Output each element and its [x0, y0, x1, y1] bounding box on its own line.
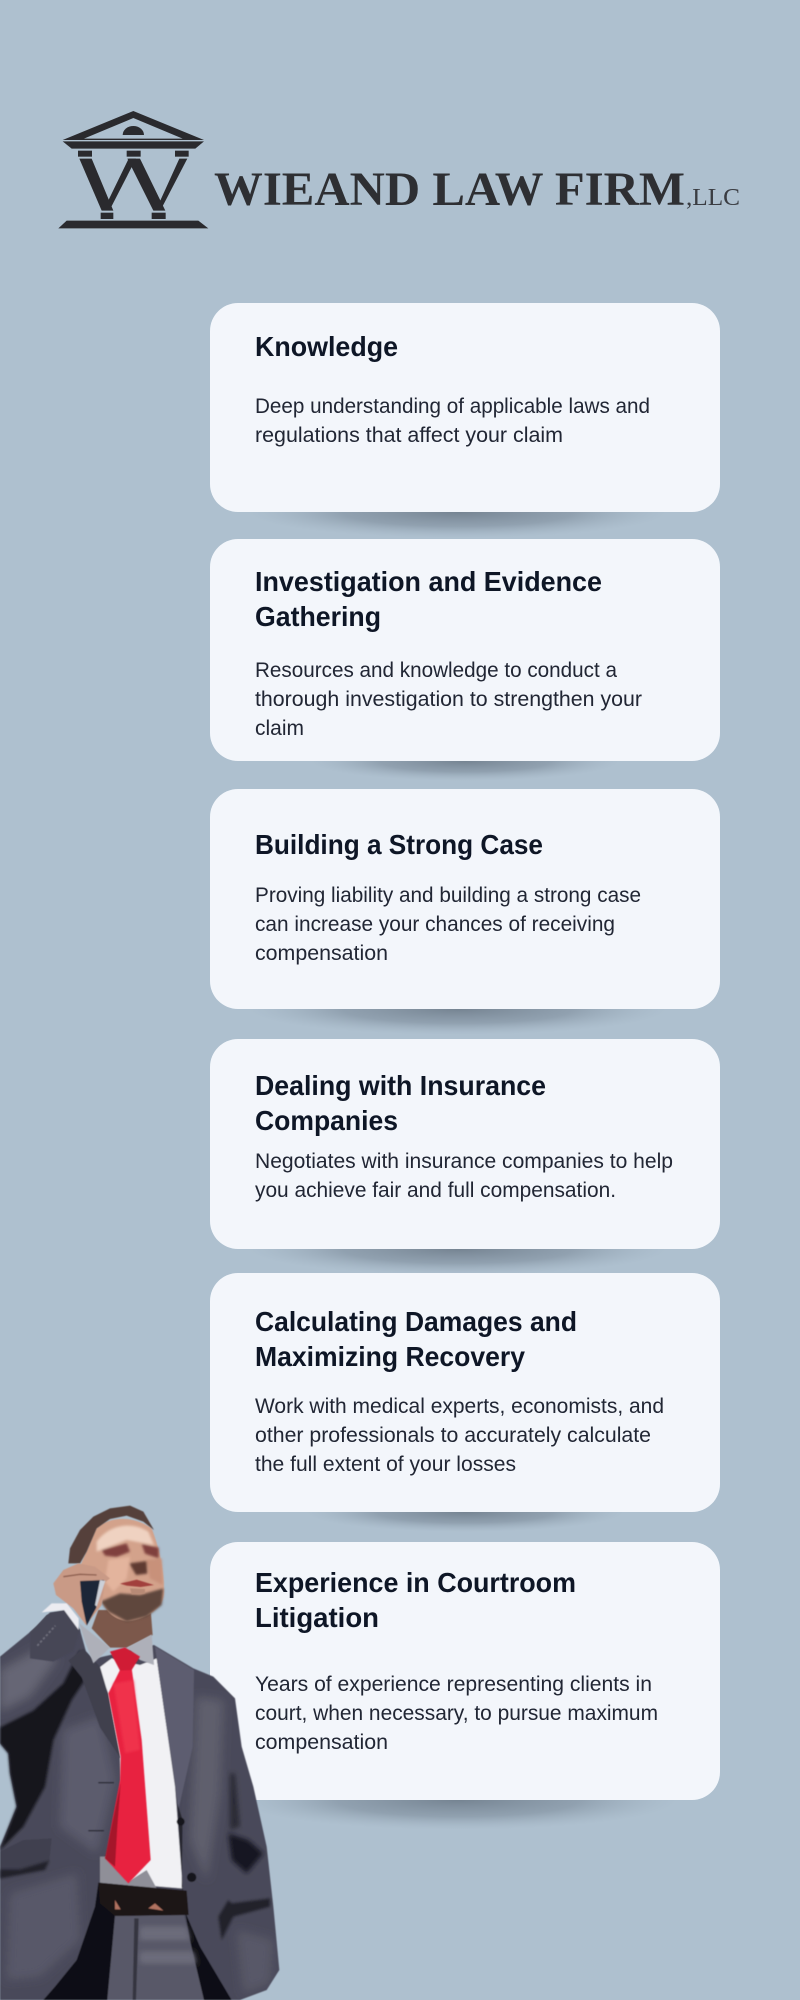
- heading: Maximizing Recovery: [255, 1341, 526, 1372]
- panel: Building a Strong Case: [210, 789, 720, 1009]
- body text: Resources and knowledge to conduct a: [255, 658, 617, 682]
- forehead highlight: [97, 1526, 154, 1552]
- phone: [80, 1580, 104, 1626]
- hand: [53, 1563, 110, 1625]
- panel: Knowledge: [210, 303, 720, 512]
- panel: Investigation and Evidence Gathering: [210, 539, 720, 761]
- left lapel: [68, 1648, 121, 1758]
- icon: temple W: [58, 111, 208, 228]
- body text: Years of experience representing clients in: [255, 1672, 652, 1696]
- heading: Building a Strong Case: [255, 829, 543, 860]
- hand, cuff and phone: [30, 1563, 110, 1662]
- panel: Calculating Damages and Maximizing Recovery: [210, 1273, 720, 1512]
- heading: [255, 1567, 576, 1633]
- body text: compensation: [255, 1730, 388, 1754]
- lower shirt shade: [100, 1857, 157, 1888]
- body text: you achieve fair and full compensation.: [255, 1178, 616, 1202]
- body text: thorough investigation to strengthen your: [255, 687, 642, 711]
- body text: Work with medical experts, economists, and: [255, 1394, 664, 1418]
- logo suffix: ,LLC: [686, 185, 740, 211]
- body text: claim: [255, 716, 304, 740]
- neck: [92, 1610, 153, 1648]
- cuff: [42, 1603, 79, 1630]
- body text: the full extent of your losses: [255, 1452, 516, 1476]
- shirt: [98, 1658, 183, 1888]
- body text: [255, 1394, 664, 1476]
- logo wordmark: WIEAND LAW FIRM: [214, 163, 685, 216]
- trousers: [107, 1915, 204, 2000]
- heading: Litigation: [255, 1602, 379, 1633]
- heading: Companies: [255, 1105, 398, 1136]
- body text: [255, 1672, 658, 1754]
- chin: [130, 1588, 145, 1594]
- cheek highlight: [105, 1557, 130, 1592]
- jacket buttons: [187, 1873, 196, 1882]
- body text: can increase your chances of receiving: [255, 912, 615, 936]
- body text: other professionals to accurately calculate: [255, 1423, 651, 1447]
- body text: [255, 883, 641, 965]
- black under jacket: [43, 1883, 115, 2000]
- heading: [255, 566, 602, 632]
- heading: [255, 1070, 546, 1136]
- body text: [255, 658, 642, 740]
- heading: Investigation and Evidence: [255, 566, 602, 597]
- body text: regulations that affect your claim: [255, 423, 563, 447]
- eyes: [102, 1543, 159, 1558]
- face: [80, 1519, 164, 1621]
- tie: [105, 1647, 151, 1883]
- sleeve buttons: [37, 1626, 55, 1646]
- body text: [255, 1149, 673, 1202]
- hair: [68, 1506, 154, 1563]
- body text: [255, 394, 650, 447]
- body text: court, when necessary, to pursue maximum: [255, 1701, 658, 1725]
- heading: Calculating Damages and: [255, 1306, 577, 1337]
- stubble: [101, 1588, 163, 1622]
- heading: Gathering: [255, 601, 381, 632]
- heading: Experience in Courtroom: [255, 1567, 576, 1598]
- shirt collar: [79, 1623, 154, 1665]
- mouth: [120, 1580, 154, 1587]
- right lapel: [155, 1647, 194, 1810]
- jacket and trousers: [0, 1611, 279, 2000]
- body text: Negotiates with insurance companies to help: [255, 1149, 673, 1173]
- body text: compensation: [255, 941, 388, 965]
- nose: [129, 1561, 147, 1575]
- head: [68, 1506, 164, 1665]
- heading: Knowledge: [255, 331, 398, 362]
- panel: Dealing with Insurance Companies: [210, 1039, 720, 1249]
- body text: Deep understanding of applicable laws and: [255, 394, 650, 418]
- logo: Wieand Law Firm: [58, 111, 740, 228]
- illustration: lawyer on phone: [0, 1506, 279, 2000]
- panel: Experience in Courtroom Litigation: [210, 1542, 720, 1800]
- heading: [255, 1306, 577, 1372]
- pocket flap: [0, 1838, 52, 1870]
- heading: Dealing with Insurance: [255, 1070, 546, 1101]
- sleeve end: [30, 1610, 80, 1662]
- right sleeve folds: [228, 1833, 263, 1873]
- right cheek: [147, 1558, 163, 1585]
- body text: Proving liability and building a strong case: [255, 883, 641, 907]
- belt: [98, 1883, 189, 1916]
- underarm shadow: [0, 1650, 89, 1850]
- card shadows: [238, 486, 678, 1830]
